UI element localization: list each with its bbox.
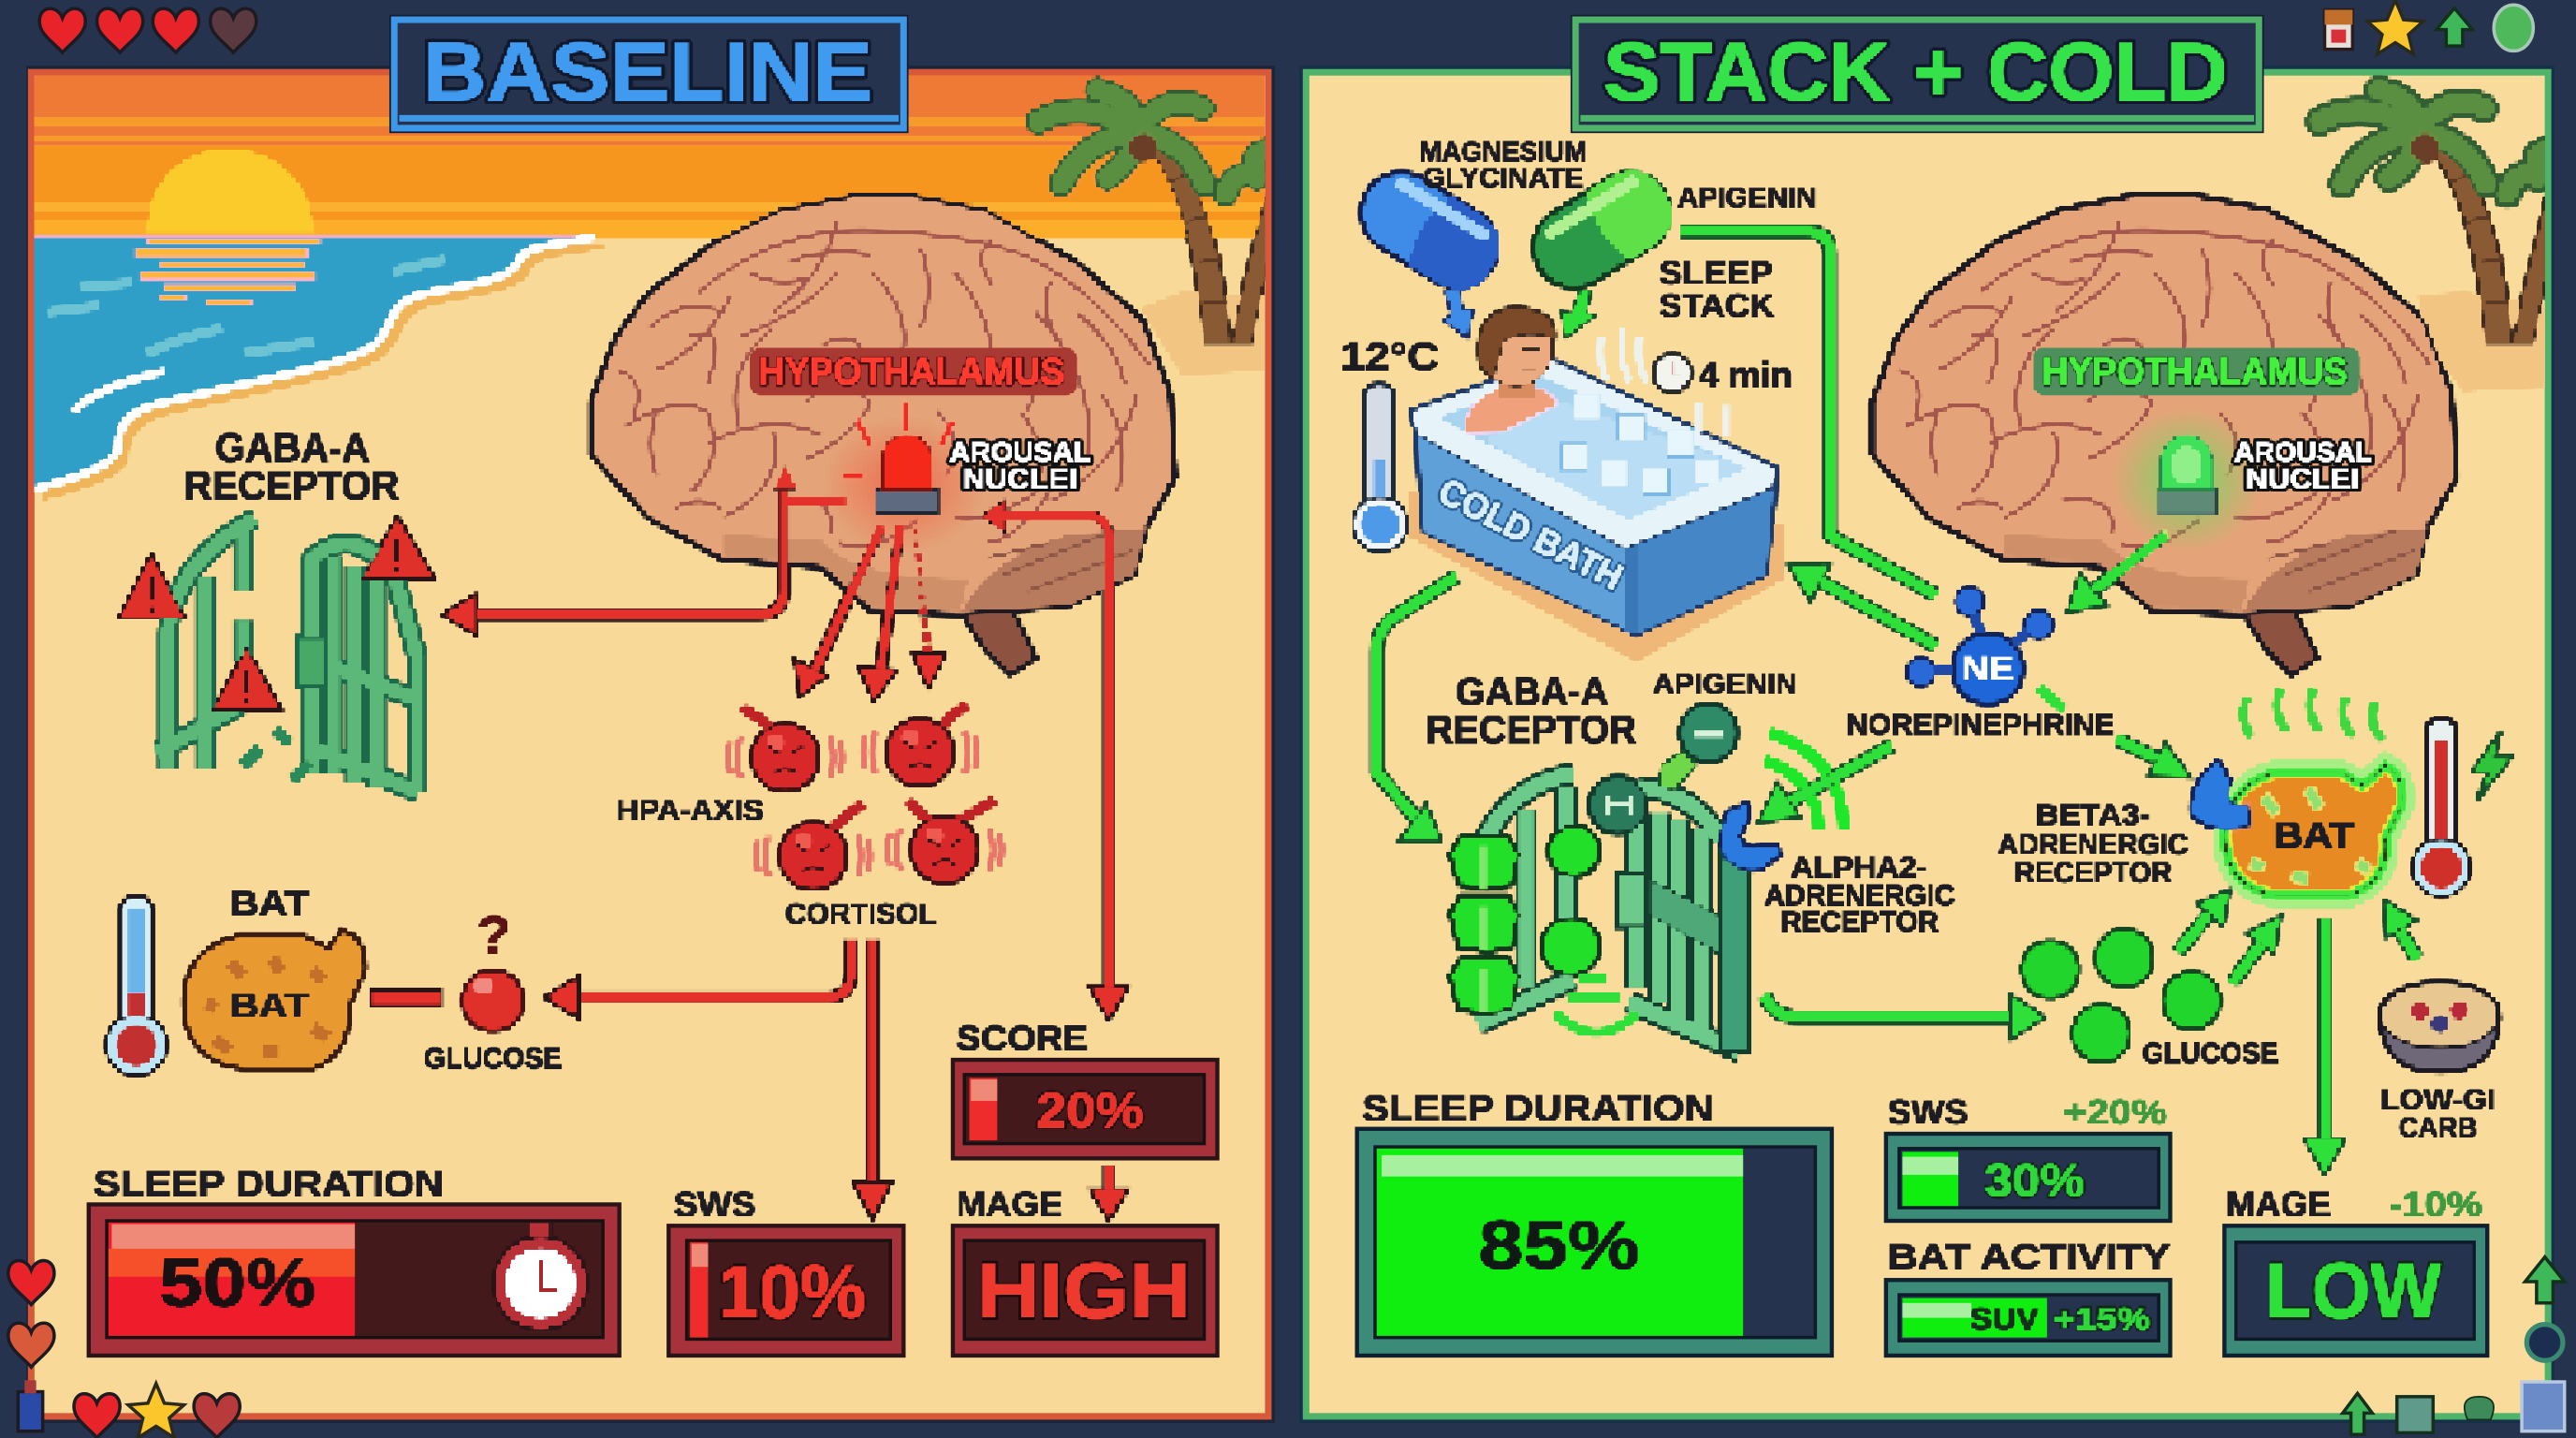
text labels: baseline: 50% (159, 1243, 315, 1321)
text labels: stack + cold: COLD BATH (1432, 471, 1629, 598)
sunset sky (35, 76, 1265, 237)
arrow: feedback to score (981, 500, 1127, 1019)
repaired GABA-A gate (1451, 705, 1748, 1051)
meter: SWS baseline (668, 1225, 903, 1356)
text labels: stack + cold: SUV (1969, 1302, 2039, 1337)
title: baseline (389, 15, 909, 133)
arrow: stack line (1682, 231, 1936, 594)
heat steam (2243, 690, 2382, 740)
icon: lightning (2472, 733, 2512, 799)
arrow: cortisol to glucose (546, 940, 851, 1017)
text labels: stack + cold: GLUCOSE (2143, 1036, 2278, 1070)
text labels: stack + cold: SWS (1888, 1093, 1969, 1131)
sand shadow (1142, 292, 1265, 374)
icon: beta3 crescent (2191, 761, 2250, 829)
top-right icons (2324, 0, 2533, 54)
text labels: stack + cold: CARB (2398, 1113, 2478, 1144)
text labels: baseline: ? (476, 905, 511, 964)
text labels: stack + cold: +20% (2063, 1093, 2167, 1131)
text labels: baseline: AROUSAL (949, 437, 1090, 468)
text labels: baseline: BAT (230, 885, 310, 923)
sun reflection (135, 238, 320, 305)
text labels: stack + cold: 85% (1479, 1206, 1640, 1284)
inhibition bar (372, 990, 440, 1005)
text labels: stack + cold: NOREPINEPHRINE (1847, 708, 2115, 741)
panel frame (26, 66, 1275, 1423)
text labels: baseline: MAGE (956, 1185, 1063, 1224)
meter: SWS improved (1886, 1134, 2170, 1221)
person in bath (1464, 307, 1564, 433)
panel: baseline (26, 66, 1277, 1423)
text labels: stack + cold: 12°C (1340, 334, 1439, 378)
alarm glow (822, 416, 986, 553)
title: stack + cold: STACK + COLD (1603, 26, 2228, 118)
text labels: stack + cold: LOW (2265, 1247, 2442, 1335)
glucose ball (463, 971, 522, 1030)
arrow: magnesium to bath (1445, 291, 1472, 337)
text labels: stack + cold: MAGE (2226, 1185, 2331, 1224)
cold bath tub (1412, 360, 1776, 636)
text labels: baseline: SCORE (956, 1020, 1088, 1058)
arrow: cortisol to SWS (855, 940, 890, 1218)
arrows: NE to receptors (1760, 688, 2190, 829)
arrow: NE to bath (1789, 564, 1936, 646)
glucose balls (2023, 930, 2219, 1062)
text labels: stack + cold: RECEPTOR (1781, 904, 1939, 938)
title: stack + cold (1571, 15, 2264, 133)
text labels: stack + cold: SLEEP DURATION (1362, 1089, 1714, 1129)
thermometer: hot (2413, 720, 2469, 896)
ice cubes (1560, 394, 1719, 494)
arrow: to GABA-A receptor (444, 465, 846, 634)
text labels: baseline: SLEEP DURATION (94, 1165, 444, 1205)
text labels: baseline: GABA-A (215, 425, 370, 471)
icon: clock (1654, 355, 1690, 391)
text labels: stack + cold: SLEEP (1660, 256, 1773, 292)
text labels: stack + cold: NUCLEI (2246, 463, 2359, 494)
text labels: stack + cold (1340, 137, 2496, 1337)
text labels: baseline: BAT (230, 986, 310, 1024)
text labels: stack + cold: ADRENERGIC (1998, 828, 2188, 861)
text labels: stack + cold: GABA-A (1456, 669, 1608, 713)
brain (592, 196, 1175, 674)
thermometer: low (107, 897, 166, 1075)
bottom-left icons (8, 1261, 240, 1438)
text labels: stack + cold: APIGENIN (1677, 183, 1817, 213)
meter: BAT activity (1886, 1280, 2170, 1356)
text labels: baseline: 20% (1036, 1083, 1144, 1138)
text labels: baseline: SWS (674, 1185, 755, 1224)
meter: sleep duration improved (1357, 1129, 1832, 1356)
arrow: bath to gate (1377, 577, 1456, 842)
brain (1873, 196, 2456, 674)
palm trees (2320, 91, 2558, 344)
text labels: baseline: HPA-AXIS (616, 793, 764, 827)
text labels: stack + cold: BETA3- (2036, 798, 2150, 831)
text labels: baseline: RECEPTOR (184, 463, 399, 509)
ocean and shoreline (35, 237, 605, 500)
hearts lives row (39, 8, 256, 52)
meter: MAGE low (2224, 1225, 2487, 1356)
panel: stack + cold (1299, 66, 2558, 1423)
text labels: baseline: HYPOTHALAMUS (759, 350, 1064, 393)
text labels: stack + cold: ADRENERGIC (1764, 878, 1955, 912)
warning triangles (120, 518, 433, 710)
arrow: apigenin to bath (1562, 291, 1593, 337)
text labels: stack + cold: BAT ACTIVITY (1888, 1238, 2170, 1276)
arrow: gate to glucose (1764, 996, 2043, 1038)
bath shadow (1410, 493, 1782, 661)
text labels: stack + cold: APIGENIN (1653, 669, 1797, 700)
steam lines (1600, 329, 1727, 437)
text labels: stack + cold: STACK (1660, 288, 1775, 325)
stopwatch (494, 1225, 587, 1329)
broken GABA-A gate (157, 520, 417, 792)
text labels: baseline: 10% (718, 1251, 866, 1335)
icon: low-GI bowl (2380, 983, 2499, 1071)
text labels: stack + cold: LOW-GI (2380, 1085, 2496, 1116)
arrow: score to MAGE (1090, 1167, 1127, 1219)
icon: green light (2111, 407, 2262, 552)
sand shadow (2419, 292, 2545, 391)
text labels: stack + cold: RECEPTOR (1426, 707, 1636, 751)
cortisol bugs (728, 705, 1003, 889)
text labels: stack + cold: AROUSAL (2234, 437, 2372, 468)
meter: MAGE high (953, 1225, 1218, 1356)
icon: blue capsule (1347, 158, 1512, 301)
text labels: stack + cold: MAGNESIUM (1419, 137, 1587, 168)
arrow: BAT to MAGE (2305, 920, 2345, 1173)
title: baseline: BASELINE (422, 26, 872, 118)
panel frame (1299, 66, 2554, 1423)
text labels: baseline: NUCLEI (962, 463, 1077, 494)
text labels: stack + cold: 4 min (1699, 356, 1793, 396)
active BAT blob (2224, 766, 2402, 896)
meter: score (953, 1060, 1218, 1158)
arrows: glucose to BAT (2178, 890, 2417, 983)
text labels: stack + cold: RECEPTOR (2014, 855, 2172, 888)
icon: red alarm (842, 401, 953, 513)
scene artwork (1347, 91, 2558, 1173)
text labels: baseline: GLUCOSE (424, 1041, 562, 1075)
icon: norepinephrine molecule (1908, 588, 2052, 703)
water over shoulders (1486, 403, 1749, 521)
text labels: stack + cold: ALPHA2- (1791, 850, 1927, 884)
text labels: baseline: HIGH (977, 1247, 1191, 1335)
thermometer: 12 degrees (1354, 385, 1406, 550)
text labels: baseline (94, 348, 1191, 1335)
text labels: baseline: CORTISOL (785, 896, 936, 930)
text labels: stack + cold: GLYCINATE (1423, 163, 1584, 194)
icon: green capsule (1519, 158, 1684, 301)
text labels: stack + cold: BAT (2274, 816, 2355, 857)
text labels: stack + cold: NE (1962, 650, 2014, 688)
palm trees (1038, 91, 1277, 344)
bottom-right icons (2343, 1257, 2565, 1434)
icon: alpha2 crescent (1720, 803, 1779, 871)
BAT blob (184, 932, 365, 1068)
beach scene artwork (35, 76, 1277, 1219)
text labels: stack + cold: +15% (2054, 1302, 2150, 1337)
text labels: stack + cold: -10% (2389, 1185, 2482, 1224)
arrows: to HPA-axis cortisol (795, 526, 944, 700)
sun (148, 150, 312, 231)
arrow: nuclei to NE (2069, 534, 2167, 611)
text labels: stack + cold: 30% (1984, 1156, 2085, 1207)
text labels: stack + cold: HYPOTHALAMUS (2042, 350, 2348, 393)
meter: sleep duration baseline (89, 1204, 620, 1356)
